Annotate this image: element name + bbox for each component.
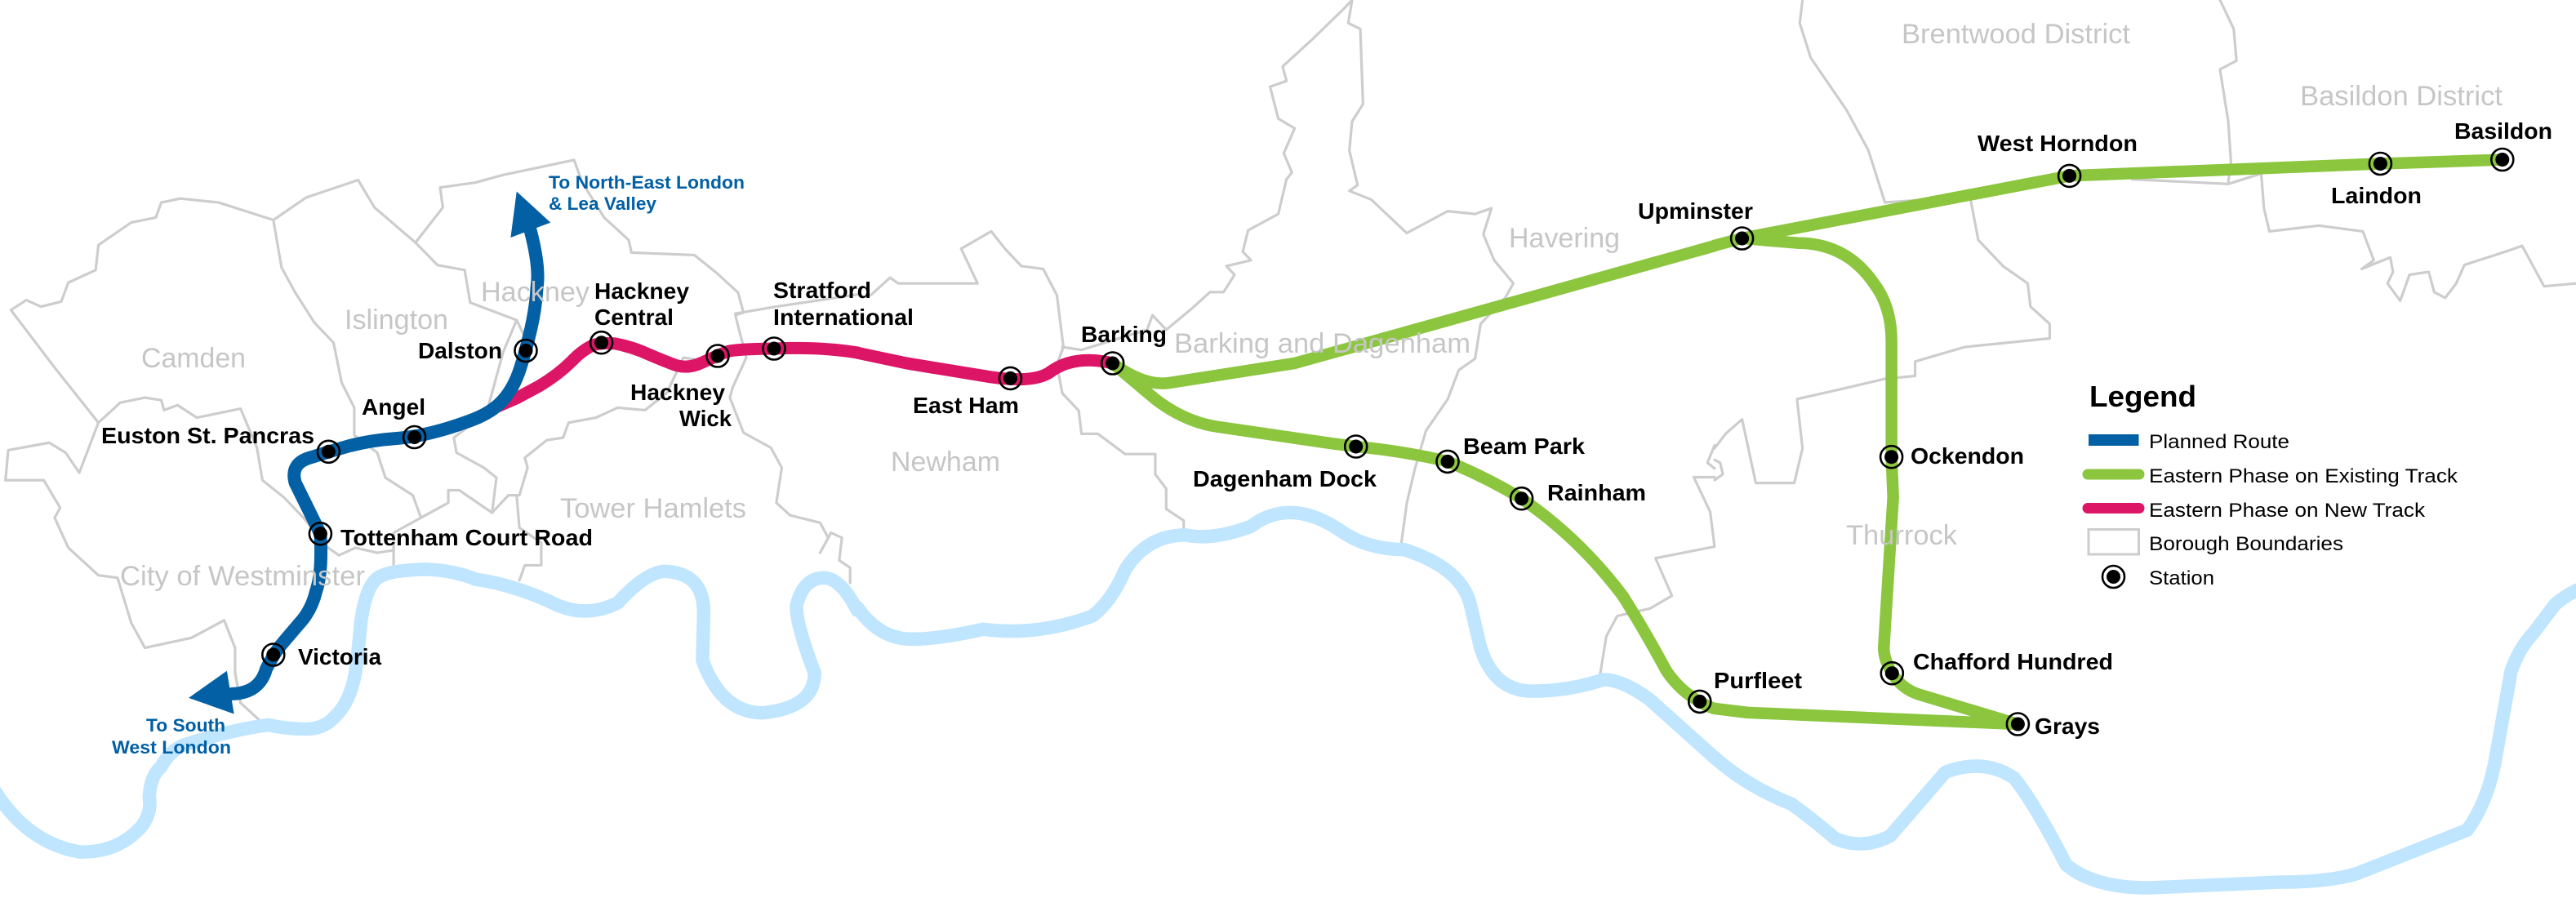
area labels: Hackney <box>481 277 589 308</box>
eastern phase on new track (pink) <box>494 344 1113 408</box>
legend: planned route <box>2089 431 2289 453</box>
legend title: Legend <box>2089 380 2196 413</box>
station labels: Euston St. Pancras <box>101 423 314 448</box>
legend: station <box>2102 566 2214 589</box>
legend: planned route: Planned Route <box>2149 431 2289 453</box>
area labels: Havering <box>1509 223 1620 254</box>
station labels: Hackney <box>594 278 689 304</box>
direction label: south-west: West London <box>112 737 231 758</box>
area labels: Brentwood District <box>1902 19 2131 50</box>
area labels: Camden <box>141 343 246 374</box>
station labels: East Ham <box>913 393 1019 418</box>
station labels: West Horndon <box>1978 131 2138 156</box>
station labels: Ockendon <box>1911 443 2024 469</box>
area labels: City of Westminster <box>120 561 365 592</box>
area labels: Basildon District <box>2300 81 2503 112</box>
station labels <box>101 118 2552 739</box>
station labels: Central <box>594 305 674 330</box>
station labels: International <box>773 305 914 330</box>
direction label: north-east: & Lea Valley <box>549 193 657 214</box>
station labels: Grays <box>2035 714 2100 739</box>
area labels: Barking and Dagenham <box>1174 328 1470 359</box>
direction label: north-east <box>549 172 745 214</box>
legend: new track: Eastern Phase on New Track <box>2149 500 2426 522</box>
station markers <box>262 149 2513 735</box>
area labels: Tower Hamlets <box>560 493 746 524</box>
station labels: Upminster <box>1638 198 1753 224</box>
station labels: Hackney <box>630 380 725 405</box>
station labels: Basildon <box>2454 118 2552 144</box>
legend: station: Station <box>2149 567 2214 589</box>
station labels: Beam Park <box>1463 433 1585 459</box>
direction label: south-west <box>112 715 231 758</box>
area labels: Newham <box>891 447 1000 478</box>
borough boundaries <box>6 0 2576 720</box>
station labels: Dalston <box>418 338 502 363</box>
station labels: Chafford Hundred <box>1913 649 2113 674</box>
station labels: Angel <box>362 394 425 420</box>
area labels: Thurrock <box>1846 520 1958 551</box>
station labels: Wick <box>679 406 732 431</box>
area labels: Islington <box>345 305 448 336</box>
direction label: north-east: To North-East London <box>549 172 745 193</box>
legend: borough boundaries <box>2089 529 2343 555</box>
station labels: Rainham <box>1547 480 1646 505</box>
legend: existing track: Eastern Phase on Existing Track <box>2149 465 2458 487</box>
station labels: Barking <box>1081 322 1167 347</box>
station labels: Dagenham Dock <box>1193 466 1377 491</box>
station labels: Stratford <box>773 278 871 303</box>
legend: borough boundaries: Borough Boundaries <box>2149 533 2343 555</box>
station labels: Victoria <box>298 644 381 669</box>
station labels: Purfleet <box>1714 668 1802 693</box>
station labels: Tottenham Court Road <box>340 525 593 550</box>
station labels: Laindon <box>2331 183 2422 208</box>
legend <box>2088 380 2458 589</box>
eastern phase on existing track (green) <box>1113 160 2503 724</box>
area labels <box>120 19 2503 592</box>
river thames <box>0 513 2576 888</box>
direction label: south-west: To South <box>146 715 225 736</box>
planned route (blue) with arrows <box>189 192 550 714</box>
